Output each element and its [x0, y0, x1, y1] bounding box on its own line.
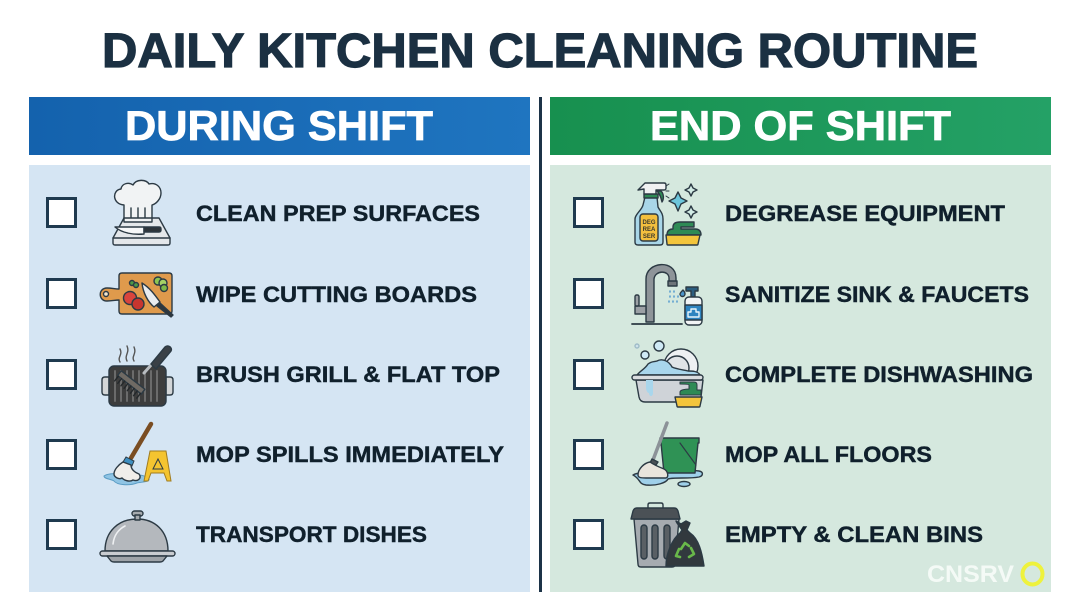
- icon: faucet and sanitizer bottle: [632, 265, 702, 325]
- icon: degreaser spray and brush: SER: [643, 234, 656, 240]
- icon: chef hat and board: [113, 180, 170, 245]
- icon: mop and green bucket: [633, 423, 702, 486]
- heading: end of shift: END OF SHIFT: [650, 102, 951, 149]
- checkbox: [48, 520, 76, 548]
- icon: serving cloche: [100, 511, 175, 562]
- heading: end of shift: [550, 97, 1051, 155]
- label: complete dishwashing: COMPLETE DISHWASHING: [725, 362, 1033, 387]
- panel background: during shift: [29, 165, 530, 592]
- row: brush grill and flat top: [48, 346, 173, 406]
- row: transport dishes: [48, 511, 175, 562]
- panel background: end of shift: [550, 165, 1051, 592]
- checkbox: [574, 280, 602, 308]
- icon: degreaser spray and brush: DEG: [642, 220, 656, 226]
- label: clean prep surfaces: CLEAN PREP SURFACES: [196, 201, 480, 226]
- checkbox: [48, 198, 76, 226]
- label: brush grill and flat top: BRUSH GRILL & FLAT TOP: [196, 362, 500, 387]
- row: mop spills immediately: [48, 424, 171, 485]
- panel: end of shift: [550, 97, 1051, 592]
- checkbox: [574, 360, 602, 388]
- checkbox: [574, 198, 602, 226]
- row: sanitize sink and faucets: [574, 265, 702, 325]
- label: sanitize sink and faucets: SANITIZE SINK & FAUCETS: [725, 282, 1029, 307]
- checkbox: [48, 280, 76, 308]
- icon: grill with brush and steam: [102, 346, 173, 406]
- watermark: CNSRV logo: CNSRV: [927, 561, 1014, 588]
- icon: cutting board with vegetables and knife: [100, 273, 173, 317]
- title: DAILY KITCHEN CLEANING ROUTINE: [102, 25, 978, 78]
- label: empty and clean bins: EMPTY & CLEAN BINS: [725, 522, 983, 547]
- heading: during shift: DURING SHIFT: [125, 102, 433, 149]
- row: wipe cutting boards: [48, 273, 173, 317]
- label: transport dishes: TRANSPORT DISHES: [196, 522, 427, 547]
- row: complete dishwashing: [574, 341, 703, 407]
- row: mop all floors: [574, 423, 702, 486]
- checkbox: [574, 520, 602, 548]
- label: mop all floors: MOP ALL FLOORS: [725, 442, 932, 467]
- label: degrease equipment: DEGREASE EQUIPMENT: [725, 201, 1005, 226]
- icon: degreaser spray and brush: [635, 183, 701, 245]
- checkbox: [48, 360, 76, 388]
- icon: mop and wet floor sign: [104, 424, 171, 485]
- icon: wash basin with plates and brush: [632, 341, 703, 407]
- row: empty and clean bins: [574, 503, 704, 567]
- checkbox: [48, 440, 76, 468]
- centre divider: [539, 97, 542, 592]
- icon: trash bin and recycling bag: [631, 503, 704, 567]
- label: mop spills immediately: MOP SPILLS IMMEDIATELY: [196, 442, 504, 467]
- panel: during shift: [29, 97, 530, 592]
- icon: degreaser spray and brush: REA: [643, 227, 656, 233]
- row: degrease equipment: [574, 183, 701, 245]
- row: clean prep surfaces: [48, 180, 170, 245]
- label: wipe cutting boards: WIPE CUTTING BOARDS: [196, 282, 477, 307]
- checkbox: [574, 440, 602, 468]
- heading: during shift: [29, 97, 530, 155]
